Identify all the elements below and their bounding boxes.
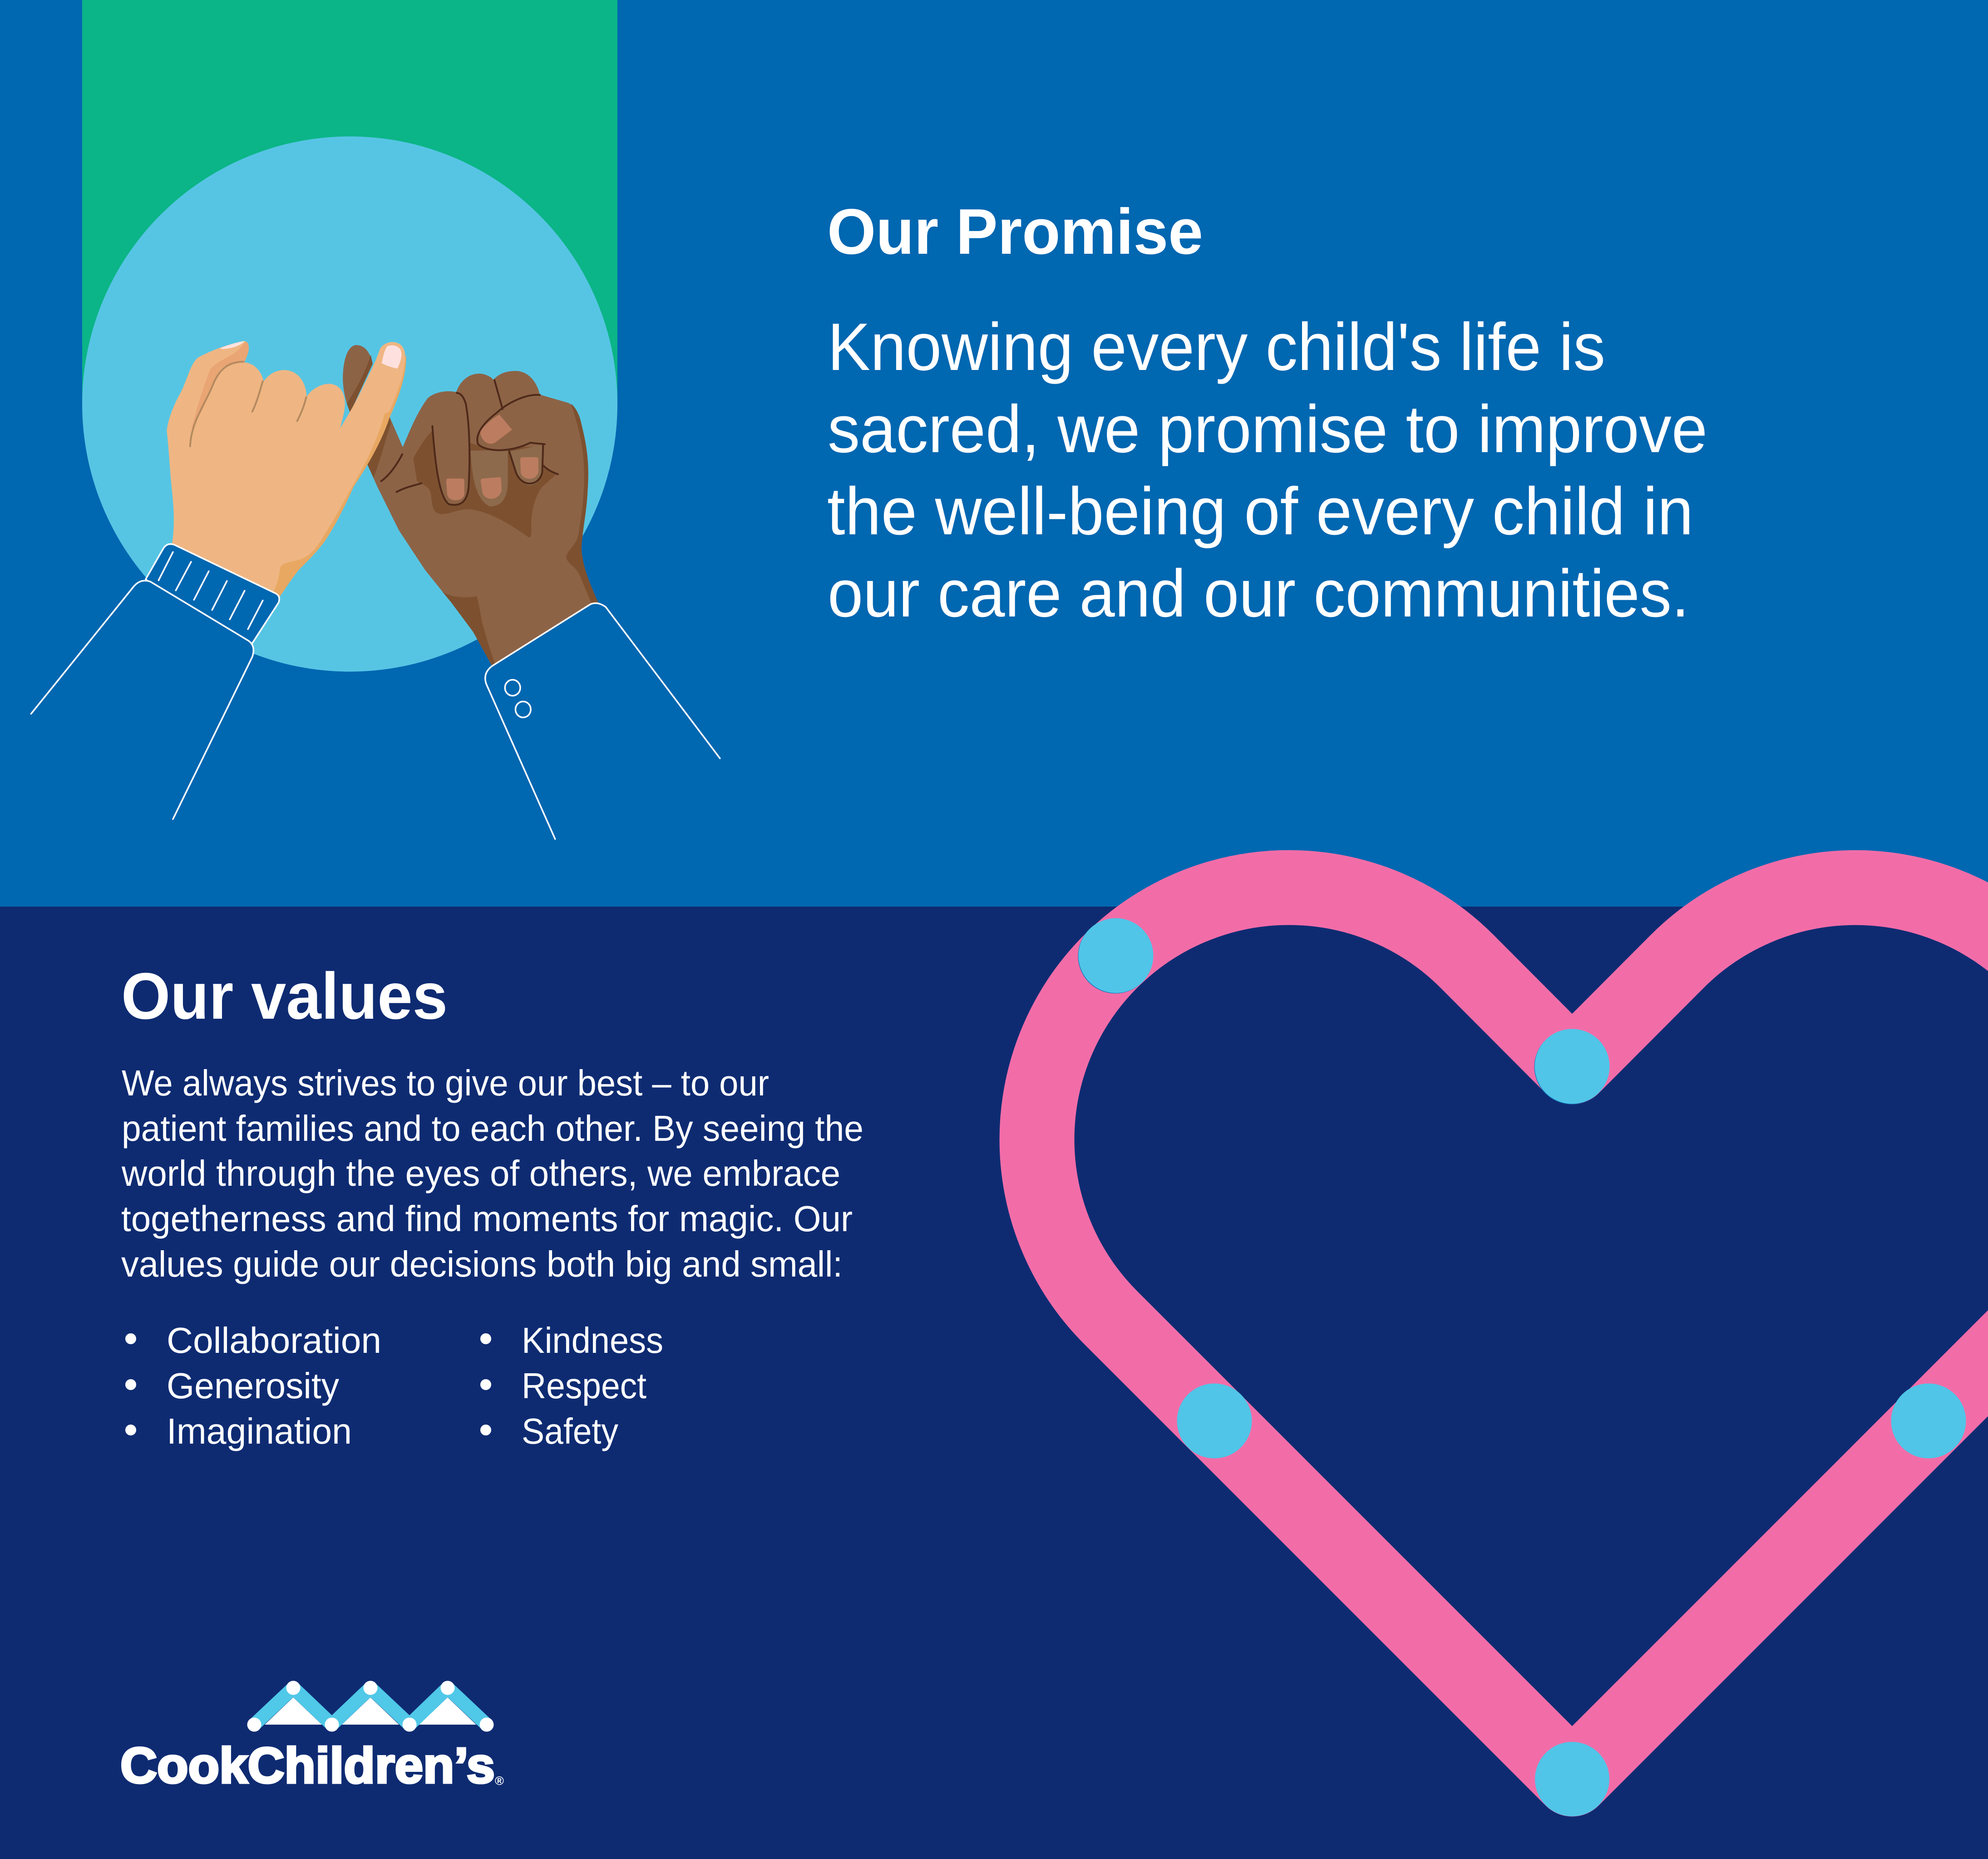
values paragraph: togetherness and find moments for magic. Our (121, 1198, 853, 1239)
values list: left column: Collaboration (167, 1320, 381, 1361)
left sleeve (31, 581, 253, 819)
finger lines (190, 362, 244, 446)
thumb (477, 395, 559, 450)
values list: left column: Generosity (167, 1366, 339, 1406)
heading: our values: Our values (121, 959, 448, 1033)
values list: left column: Imagination (167, 1411, 352, 1451)
values paragraph: values guide our decisions both big and small: (121, 1244, 843, 1284)
light blue circle (82, 136, 617, 672)
heart dots (1078, 918, 1966, 1816)
panel: promise background (0, 0, 1988, 907)
values list: right column: Kindness (522, 1320, 663, 1361)
heart outline (1037, 888, 1988, 1779)
icon: light hand (167, 341, 406, 598)
heading: our promise: Our Promise (827, 196, 1203, 268)
nails (382, 345, 401, 369)
icon: dark hand (343, 345, 598, 666)
promise statement: our care and our communities. (828, 556, 1689, 631)
panel: values background (0, 907, 1988, 1859)
promise statement: Knowing every child's life is (828, 310, 1605, 385)
sleeve buttons (505, 680, 520, 696)
peach shading (191, 341, 249, 431)
nails (446, 414, 538, 500)
finger: ring (510, 445, 544, 485)
promise statement (827, 310, 1707, 631)
logo wordmark: CookChildren’s (120, 1738, 495, 1794)
green backdrop (82, 0, 617, 404)
values paragraph: patient families and to each other. By seeing the (122, 1108, 863, 1149)
values paragraph: We always strives to give our best – to our (122, 1063, 769, 1103)
registered mark: ® (495, 1774, 504, 1788)
logo mark (247, 1681, 494, 1731)
values paragraph (121, 1063, 863, 1284)
values list: right column: Respect (522, 1366, 646, 1406)
logo: Cook Children's (120, 1681, 504, 1794)
values list: right column (480, 1320, 663, 1451)
right sleeve (485, 603, 720, 839)
knuckle lines (477, 395, 545, 450)
left cuff (146, 544, 279, 643)
values list: right column: Safety (522, 1411, 618, 1451)
promise statement: the well-being of every child in (827, 474, 1693, 549)
values paragraph: world through the eyes of others, we embrace (121, 1153, 840, 1193)
finger: middle (471, 450, 508, 507)
values list: left column (125, 1320, 381, 1451)
promise statement: sacred, we promise to improve (828, 392, 1707, 467)
illustration: pinky promise (31, 0, 720, 839)
finger: index (432, 393, 469, 505)
